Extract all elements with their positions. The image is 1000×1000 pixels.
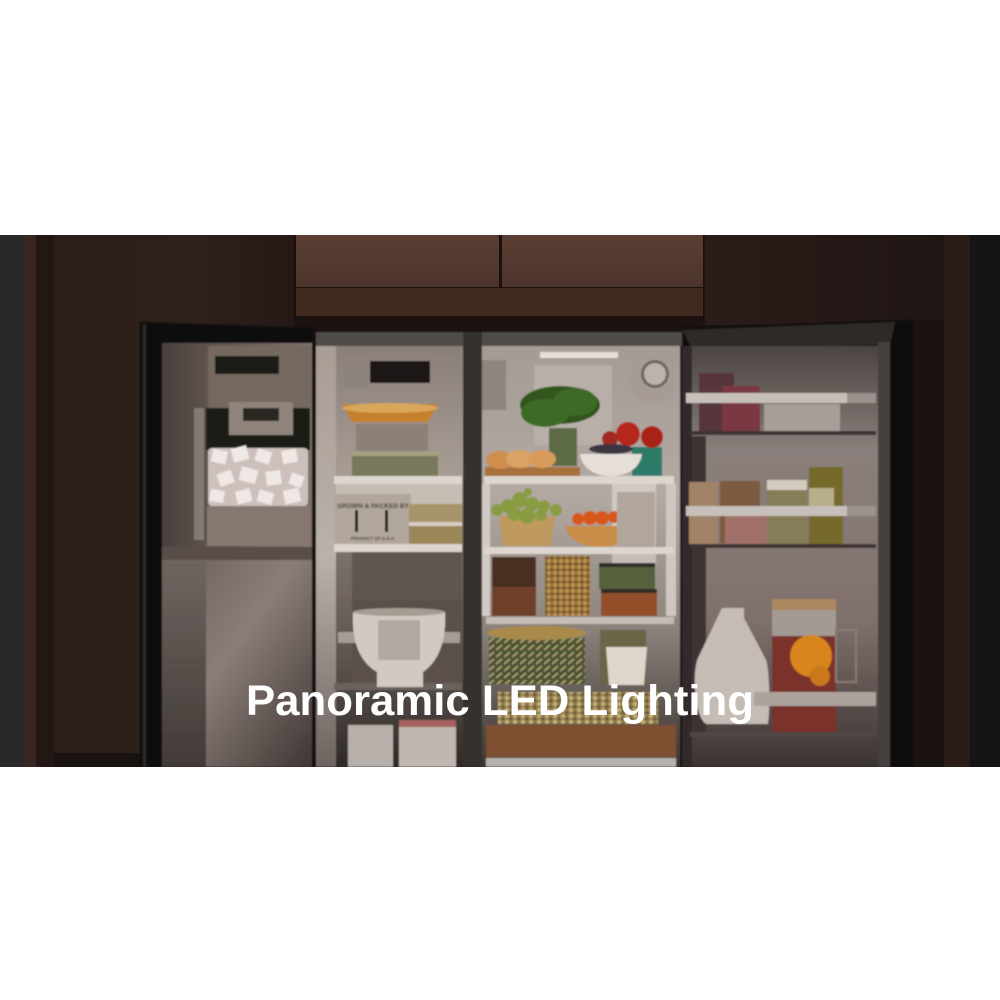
bagged pastries [409,504,462,544]
milk jug [695,608,769,724]
door bins [686,393,876,403]
tomatoes, berries and bowl [580,422,663,476]
photo: open refrigerator with panoramic LED lighting [0,235,1000,767]
right door with bins [682,320,912,767]
refrigerator interior [312,332,682,767]
grapes in basket [491,488,562,546]
middle bin jars [689,467,843,545]
peppers in wooden bowl [564,510,618,548]
ice cubes [208,445,308,506]
casserole and wooden tray [486,692,676,767]
box: grown and packed by [335,494,411,544]
glass containers [492,556,657,616]
shelves [334,476,674,690]
salad container [487,626,587,684]
top bin jars [699,373,840,433]
title: Panoramic LED Lighting [246,677,754,725]
pitcher with citrus [772,599,856,732]
stacked baking dishes [352,424,438,476]
box: grown and packed by: PRODUCT OF U.S.A. [351,536,395,541]
package on shelf [617,492,655,546]
bread rolls on board [485,450,580,476]
ribbed ceramic bowl [353,612,445,687]
pie [342,403,438,422]
herbs in vase [520,386,600,466]
box: grown and packed by: GROWN & PACKED BY [337,503,410,510]
storage tubs [348,720,456,767]
left freezer door with ice dispenser [140,322,316,767]
food items [335,386,676,767]
takeout box and jar [600,630,647,685]
background wall and cabinetry [0,235,1000,767]
